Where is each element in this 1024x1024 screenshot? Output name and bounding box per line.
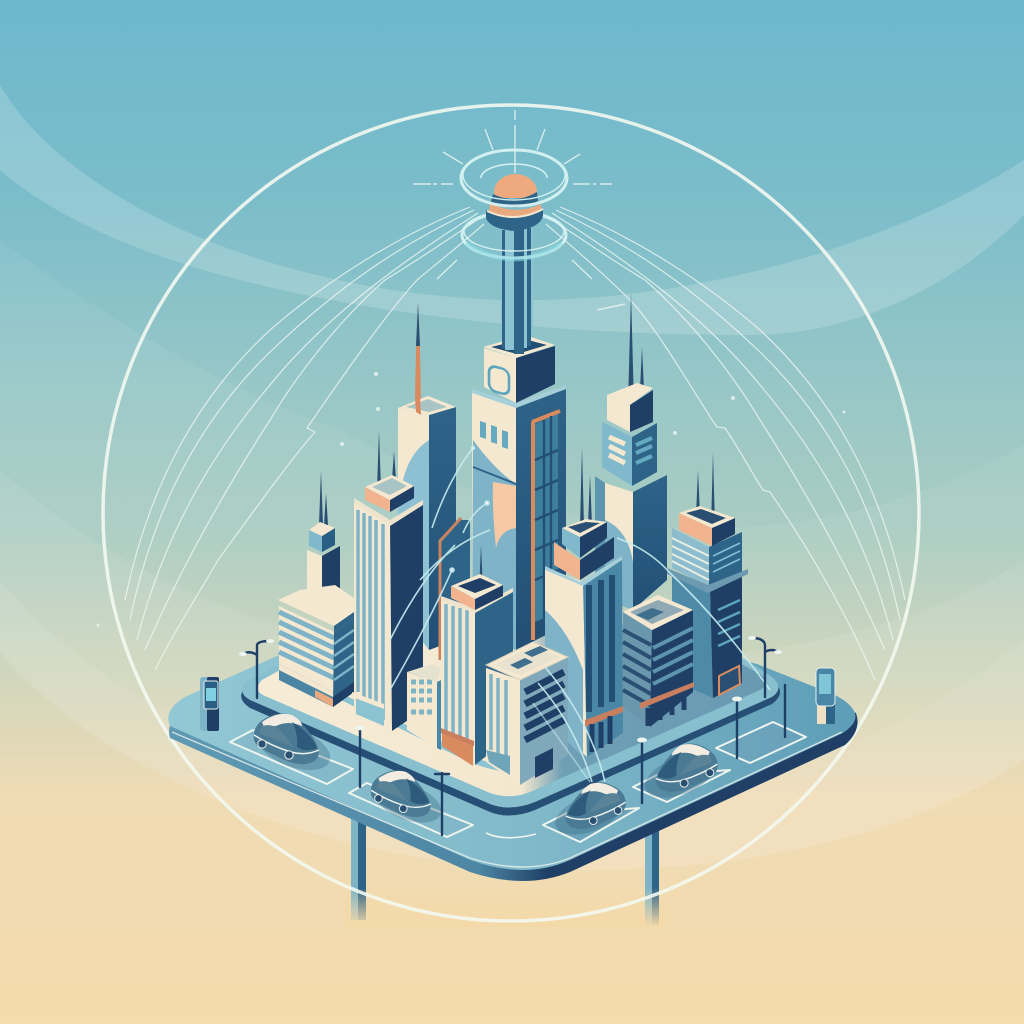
antenna rays: [413, 110, 612, 279]
upper signal ring: [461, 150, 567, 206]
platform top: [168, 600, 855, 870]
building right: [667, 452, 748, 698]
building left tall: [352, 430, 423, 731]
central tower: [472, 330, 566, 650]
building front: [486, 642, 568, 785]
building striped right: [623, 595, 694, 727]
building far left: [278, 470, 354, 707]
small windows: [480, 421, 508, 449]
dome circle: [103, 105, 919, 921]
kiosk right: [816, 668, 835, 724]
signal arcs left: [125, 207, 484, 670]
antenna tower: [413, 110, 612, 348]
upper block: [483, 335, 555, 403]
lower body left face: [472, 392, 516, 650]
parking pads: [230, 722, 806, 842]
car two: [369, 770, 447, 831]
building back left: [398, 303, 470, 660]
support pillars: [345, 815, 665, 927]
kiosk left: [200, 677, 219, 731]
car three: [550, 782, 627, 843]
sparkle dots: [96, 304, 846, 626]
platform rim line: [172, 732, 842, 867]
lower body right face: [516, 387, 566, 650]
signal arcs right: [546, 207, 905, 680]
platform edge: [169, 664, 858, 881]
lower signal ring: [462, 211, 566, 259]
ledge: [472, 385, 566, 408]
car one: [252, 713, 336, 779]
building small cream: [407, 664, 441, 750]
shaft inside top: [502, 330, 531, 354]
building back right: [595, 293, 667, 610]
connection arcs between buildings: [390, 446, 770, 782]
lower body swoop: [472, 440, 516, 650]
plinth: [241, 600, 780, 816]
car four: [639, 744, 719, 806]
dome cap: [486, 174, 543, 231]
window column: [532, 411, 560, 640]
building mid right: [545, 447, 623, 757]
street lamps: [239, 636, 785, 835]
building center front: [441, 545, 513, 766]
road marking: [486, 833, 536, 838]
spires: [628, 293, 644, 405]
antenna shaft: [501, 228, 533, 348]
